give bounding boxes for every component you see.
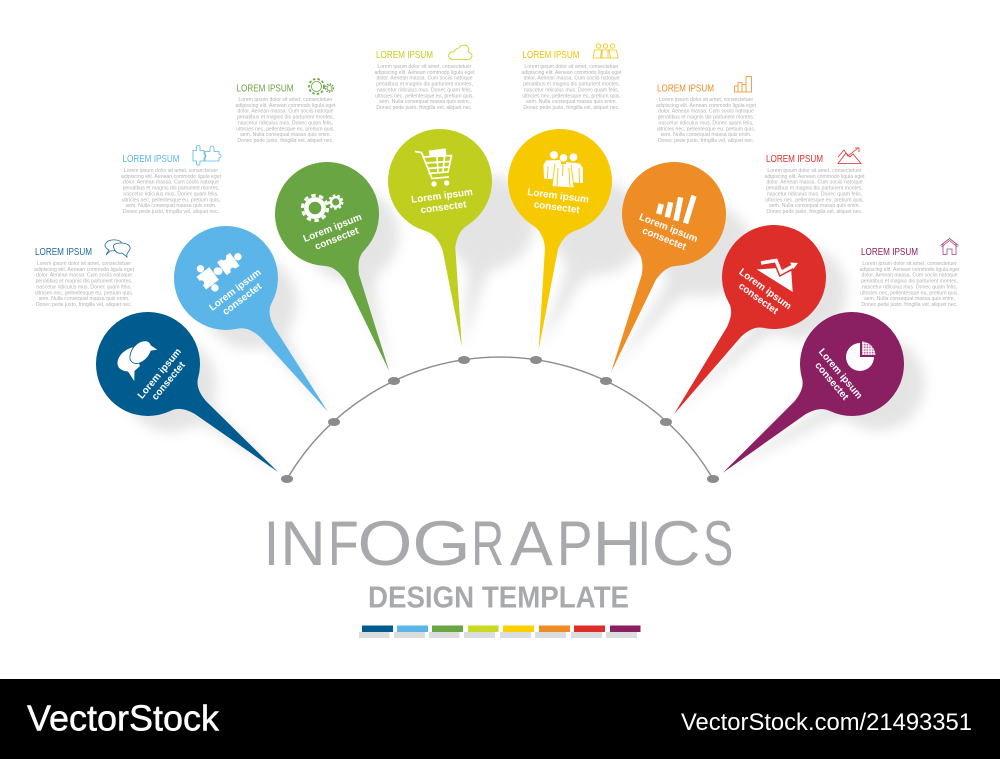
icon: mountain with arrow bbox=[757, 260, 798, 292]
text block 8 bbox=[859, 238, 960, 308]
text block 2: ultricies nec, pellentesque eu, pretium quis, bbox=[122, 197, 220, 203]
outline icon: gears bbox=[309, 79, 334, 94]
text block 5: sem. Nulla consequat massa quis enim. bbox=[526, 99, 617, 105]
pin 7: red mountain chart bbox=[632, 204, 847, 445]
text block 8: ultricies nec, pellentesque eu, pretium quis, bbox=[860, 290, 959, 296]
text block 1: penatibus et magnis dis parturient montes, bbox=[36, 279, 132, 285]
title: O bbox=[358, 509, 412, 579]
text block 4: adipiscing elit. Aenean commodo ligula eget bbox=[374, 70, 475, 76]
text block 2 bbox=[121, 145, 222, 215]
text block 3: adipiscing elit. Aenean commodo ligula eget bbox=[235, 103, 336, 109]
text block 1: nascetur ridiculus mus. Donec quam felis, bbox=[36, 284, 132, 290]
text block 3: LOREM IPSUM bbox=[236, 84, 294, 94]
timeline arc with nodes bbox=[281, 356, 719, 483]
text block 4 bbox=[374, 45, 475, 111]
text block 8: Donec pede justo, fringilla vel, aliquet nec. bbox=[861, 302, 958, 308]
title: G bbox=[412, 509, 471, 579]
text block 7: Donec pede justo, fringilla vel, aliquet nec. bbox=[766, 209, 863, 215]
text block 4: LOREM IPSUM bbox=[376, 50, 433, 61]
text block 1: LOREM IPSUM bbox=[35, 247, 92, 258]
text block 8: sem. Nulla consequat massa quis enim. bbox=[864, 296, 955, 302]
label: consectet bbox=[150, 359, 188, 402]
pin 4: lime cart bbox=[382, 123, 513, 353]
label: consectet bbox=[533, 199, 581, 216]
title: N bbox=[280, 509, 326, 579]
text block 6: penatibus et magnis dis parturient montes, bbox=[658, 115, 754, 121]
text block 6 bbox=[656, 76, 757, 144]
label: consectet bbox=[221, 281, 265, 318]
label: consectet bbox=[641, 225, 688, 253]
text block 7: dolor. Aenean massa. Cum sociis natoque bbox=[766, 180, 863, 186]
label: Lorem ipsum bbox=[637, 212, 699, 245]
label: consectet bbox=[420, 199, 468, 216]
text block 7: adipiscing elit. Aenean commodo ligula eget bbox=[764, 174, 865, 180]
pin 3: green gears bbox=[260, 146, 438, 390]
label: consectet bbox=[313, 225, 361, 253]
watermark url: VectorStock.com/21493351 bbox=[681, 709, 972, 736]
text block 3: Lorem ipsum dolor sit amet, consectetuer bbox=[238, 97, 333, 103]
text block 1: ultricies nec, pellentesque eu, pretium quis, bbox=[35, 290, 133, 296]
icon: puzzle pieces bbox=[190, 246, 247, 297]
label: Lorem ipsum bbox=[136, 346, 184, 401]
subtitle: DESIGN TEMPLATE bbox=[368, 581, 629, 615]
text block 2: penatibus et magnis dis parturient montes, bbox=[123, 186, 219, 192]
title: R bbox=[471, 509, 504, 579]
text block 1: Donec pede justo, fringilla vel, aliquet nec. bbox=[36, 302, 132, 308]
text block 5: dolor. Aenean massa. Cum sociis natoque bbox=[523, 76, 620, 82]
label: Lorem ipsum bbox=[411, 187, 474, 206]
label: consectet bbox=[812, 360, 851, 403]
title: H bbox=[593, 509, 642, 579]
text block 6: LOREM IPSUM bbox=[657, 84, 714, 94]
icon: shopping cart bbox=[415, 148, 452, 187]
text block 4: nascetur ridiculus mus. Donec quam felis, bbox=[377, 87, 472, 93]
text block 6: dolor. Aenean massa. Cum sociis natoque bbox=[658, 109, 754, 115]
text block 7: nascetur ridiculus mus. Donec quam felis, bbox=[767, 191, 862, 197]
label: Lorem ipsum bbox=[207, 267, 264, 313]
text block 2: nascetur ridiculus mus. Donec quam felis, bbox=[123, 191, 219, 197]
text block 2: dolor. Aenean massa. Cum sociis natoque bbox=[123, 180, 219, 186]
text block 6: sem. Nulla consequat massa quis enim. bbox=[661, 132, 751, 138]
text block 5: adipiscing elit. Aenean commodo ligula eget bbox=[521, 70, 622, 76]
text block 6: adipiscing elit. Aenean commodo ligula eget bbox=[656, 103, 757, 109]
label: Lorem ipsum bbox=[737, 267, 793, 312]
text block 3: sem. Nulla consequat massa quis enim. bbox=[240, 132, 331, 138]
outline icon: cloud bbox=[449, 45, 472, 60]
text block 5: Donec pede justo, fringilla vel, aliquet nec. bbox=[523, 105, 620, 111]
pin 5: yellow people bbox=[487, 123, 618, 356]
text block 6: Lorem ipsum dolor sit amet, consectetuer bbox=[659, 97, 753, 103]
outline icon: house bbox=[940, 238, 958, 254]
text block 2: Donec pede justo, fringilla vel, aliquet nec. bbox=[123, 209, 219, 215]
text block 8: LOREM IPSUM bbox=[861, 247, 918, 258]
text block 1: dolor. Aenean massa. Cum sociis natoque bbox=[36, 273, 132, 279]
pin 8: purple pie bbox=[689, 291, 925, 513]
text block 7 bbox=[764, 148, 865, 215]
text block 4: ultricies nec, pellentesque eu, pretium quis, bbox=[375, 93, 474, 99]
text block 6: nascetur ridiculus mus. Donec quam felis, bbox=[658, 120, 754, 126]
text block 4: Lorem ipsum dolor sit amet, consectetuer bbox=[377, 64, 472, 70]
label: consectet bbox=[736, 281, 781, 317]
icon: gears bbox=[302, 195, 343, 221]
text block 7: LOREM IPSUM bbox=[766, 154, 823, 165]
text block 5: nascetur ridiculus mus. Donec quam felis, bbox=[524, 87, 619, 93]
text block 2: Lorem ipsum dolor sit amet, consectetuer bbox=[124, 168, 218, 174]
colour legend bars bbox=[359, 626, 640, 638]
text block 4: sem. Nulla consequat massa quis enim. bbox=[379, 99, 470, 105]
pin 1: navy speech bbox=[75, 291, 311, 512]
text block 3: penatibus et magnis dis parturient montes, bbox=[237, 115, 334, 121]
text block 1: sem. Nulla consequat massa quis enim. bbox=[39, 296, 129, 302]
label: Lorem ipsum bbox=[302, 212, 364, 245]
text block 7: sem. Nulla consequat massa quis enim. bbox=[769, 203, 860, 209]
watermark logo: VectorStock bbox=[27, 698, 220, 738]
title: A bbox=[510, 509, 553, 579]
text block 3: Donec pede justo, fringilla vel, aliquet nec. bbox=[237, 138, 334, 144]
text block 4: dolor. Aenean massa. Cum sociis natoque bbox=[376, 76, 473, 82]
text block 3: dolor. Aenean massa. Cum sociis natoque bbox=[237, 109, 334, 115]
title: I bbox=[637, 509, 651, 579]
pin 2: light blue puzzle bbox=[153, 205, 369, 443]
outline icon: puzzle bbox=[193, 145, 221, 165]
pin 6: orange bars bbox=[563, 146, 742, 391]
text block 8: adipiscing elit. Aenean commodo ligula eget bbox=[859, 267, 960, 273]
text block 7: Lorem ipsum dolor sit amet, consectetuer bbox=[767, 168, 862, 174]
title: S bbox=[703, 509, 733, 579]
outline icon: people bbox=[593, 44, 618, 58]
text block 1: adipiscing elit. Aenean commodo ligula eget bbox=[34, 267, 135, 273]
text block 2: adipiscing elit. Aenean commodo ligula eget bbox=[121, 174, 222, 180]
label: Lorem ipsum bbox=[527, 187, 590, 206]
icon: bar chart bbox=[659, 196, 694, 223]
text block 7: ultricies nec, pellentesque eu, pretium quis, bbox=[765, 197, 864, 203]
icon: pie chart bbox=[846, 342, 876, 371]
title: I bbox=[264, 509, 279, 579]
text block 7: penatibus et magnis dis parturient montes, bbox=[766, 186, 863, 192]
text block 3 bbox=[235, 79, 336, 144]
outline icon: speech bbox=[105, 240, 130, 257]
title: C bbox=[652, 509, 701, 579]
text block 5 bbox=[521, 44, 622, 111]
outline icon: bars bbox=[734, 76, 752, 92]
watermark band bbox=[0, 679, 1000, 759]
text block 4: penatibus et magnis dis parturient montes, bbox=[376, 82, 473, 88]
icon: group of people bbox=[544, 151, 583, 188]
text block 1 bbox=[34, 240, 135, 308]
text block 8: penatibus et magnis dis parturient montes, bbox=[861, 279, 958, 285]
text block 5: ultricies nec, pellentesque eu, pretium quis, bbox=[522, 93, 621, 99]
text block 6: Donec pede justo, fringilla vel, aliquet nec. bbox=[658, 138, 754, 144]
text block 1: Lorem ipsum dolor sit amet, consectetuer bbox=[37, 261, 131, 267]
icon: speech bubbles bbox=[117, 341, 158, 381]
text block 8: dolor. Aenean massa. Cum sociis natoque bbox=[861, 273, 958, 279]
text block 5: Lorem ipsum dolor sit amet, consectetuer bbox=[524, 64, 619, 70]
title: P bbox=[557, 509, 593, 579]
text block 3: nascetur ridiculus mus. Donec quam felis, bbox=[238, 120, 333, 126]
text block 3: ultricies nec, pellentesque eu, pretium quis, bbox=[236, 126, 335, 132]
pin shadows bbox=[104, 165, 942, 514]
text block 8: nascetur ridiculus mus. Donec quam felis, bbox=[862, 284, 957, 290]
title: F bbox=[328, 509, 359, 579]
outline icon: mountain chart bbox=[838, 148, 861, 164]
text block 4: Donec pede justo, fringilla vel, aliquet nec. bbox=[376, 105, 473, 111]
text block 5: penatibus et magnis dis parturient montes, bbox=[523, 82, 620, 88]
text block 2: sem. Nulla consequat massa quis enim. bbox=[126, 203, 216, 209]
text block 5: LOREM IPSUM bbox=[522, 50, 580, 61]
text block 8: Lorem ipsum dolor sit amet, consectetuer bbox=[862, 261, 957, 267]
text block 2: LOREM IPSUM bbox=[122, 154, 180, 165]
label: Lorem ipsum bbox=[816, 347, 864, 401]
text block 6: ultricies nec, pellentesque eu, pretium quis, bbox=[657, 126, 755, 132]
